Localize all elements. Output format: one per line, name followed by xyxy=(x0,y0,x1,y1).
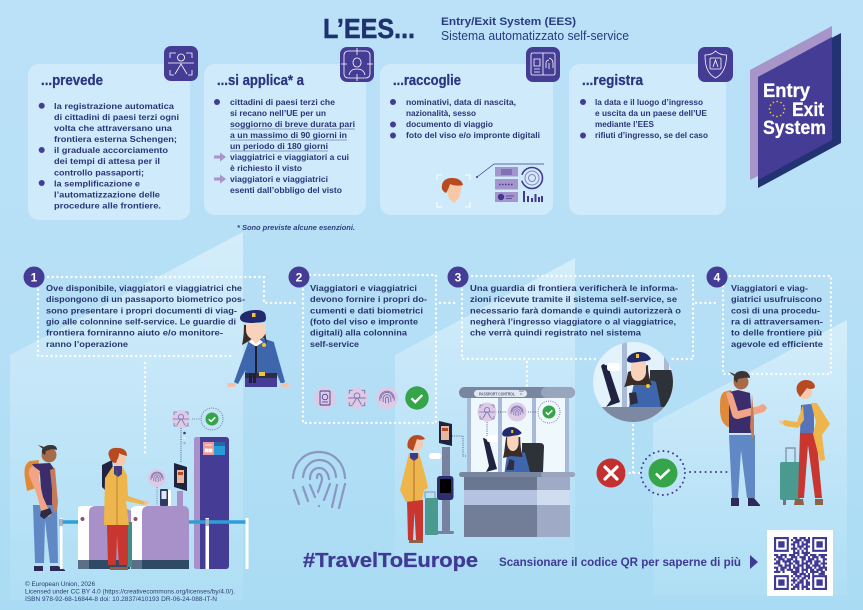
panel: prevede xyxy=(28,46,198,220)
step 3: 3 xyxy=(455,270,462,284)
QR code xyxy=(767,530,833,596)
illustration: left gate xyxy=(78,506,134,569)
bullets list: a un massimo di 90 giorni in xyxy=(230,130,347,140)
step 1: gio alle colonnine self-service. Le guardie di xyxy=(46,316,236,326)
bullets list: rifiuti d’ingresso, se del caso xyxy=(595,130,708,140)
step 2: (foto del viso e impronte xyxy=(310,316,418,326)
bullets list: si recano nell’UE per un xyxy=(230,108,326,118)
bullets list: esenti dall’obbligo del visto xyxy=(230,185,342,195)
step 2: Viaggiatori e viaggiatrici xyxy=(310,283,417,293)
icon: shield xyxy=(698,47,733,82)
bullets list: di cittadini di paesi terzi ogni xyxy=(54,112,179,122)
connectors: dotted step frames xyxy=(38,275,831,473)
bullets list xyxy=(39,101,179,210)
bullets list: soggiorno di breve durata pari xyxy=(230,119,355,129)
step 2: cumenti e dati biometrici xyxy=(310,306,423,316)
icon: face scan xyxy=(164,46,198,81)
QR prompt: Scansionare il codice QR per saperne di più xyxy=(499,557,741,569)
step 4: Viaggiatori e viag- xyxy=(731,283,808,293)
icon: large fingerprint xyxy=(293,452,345,508)
arrow: visa exempt xyxy=(214,174,226,184)
bullets list: nazionalità, sesso xyxy=(406,108,476,118)
icon: passport and fingerprint xyxy=(526,47,560,82)
logo: Entry Exit System: Exit xyxy=(792,100,825,121)
copyright footer: © European Union, 2026 xyxy=(25,581,96,588)
heading: ...raccoglie xyxy=(393,73,461,89)
step 2: self-service xyxy=(310,339,359,349)
logo: Entry Exit System: System xyxy=(763,118,826,139)
step 1: frontiera forniranno aiuto e/o monitore- xyxy=(46,328,223,338)
bullets list: la registrazione automatica xyxy=(54,101,174,111)
heading: ...registra xyxy=(582,73,644,89)
hashtag: #TravelToEurope xyxy=(303,550,478,572)
illustration: traveller with passport xyxy=(25,445,65,571)
step 1: dispongono di un passaporto biometrico pos- xyxy=(46,294,245,304)
bullets list: viaggiatori e viaggiatrici xyxy=(230,174,328,184)
illustration: kiosk xyxy=(194,437,229,569)
bullets list: frontiera esterna Schengen; xyxy=(54,134,177,144)
panel: raccoglie xyxy=(380,47,560,215)
bullets list: cittadini di paesi terzi che xyxy=(230,97,335,107)
step 2 xyxy=(288,266,427,349)
copyright footer xyxy=(25,581,235,603)
logo: Entry Exit System xyxy=(750,26,841,188)
bullets list: il graduale accorciamento xyxy=(54,145,168,155)
arrow: to QR xyxy=(750,555,758,569)
step 4: to delle frontiere più xyxy=(731,328,822,338)
copyright footer: ISBN 978-92-68-16844-8 doi: 10.2837/410193 DR-06-24-088-IT-N xyxy=(25,597,217,603)
step 1: ranno l’operazione xyxy=(46,339,128,349)
icon: approved xyxy=(641,451,685,495)
subtitle xyxy=(441,16,629,43)
connector: approved to travellers xyxy=(690,471,727,473)
bullets list: mediante l’EES xyxy=(595,119,654,129)
illustration: stanchions xyxy=(59,518,248,569)
bullets list: foto del viso e/o impronte digitali xyxy=(406,130,540,140)
illustration: right gate xyxy=(131,463,189,569)
illustration: biometric post xyxy=(437,421,474,534)
illustration: traveller at gate xyxy=(102,448,149,570)
step 2: 2 xyxy=(296,270,303,284)
bullets list xyxy=(390,97,540,140)
step 1: 1 xyxy=(31,270,38,284)
bullets list: la semplificazione e xyxy=(54,178,140,188)
icon: fingerprint badge gate xyxy=(148,469,166,505)
panel: si applica xyxy=(204,47,374,215)
bullets list: volta che attraversano una xyxy=(54,123,172,133)
step 3: negherà l’ingresso viaggiatore o al viaggiatrice, xyxy=(470,316,676,326)
step 4: così di una procedu- xyxy=(731,306,820,316)
icon: face scan gate xyxy=(172,410,200,462)
step 4: giatrici usufruiscono xyxy=(731,294,822,304)
illustration: passport control booth: PASSPORT CONTROL xyxy=(479,392,515,396)
background light shapes xyxy=(10,232,847,600)
logo: Entry Exit System: Entry xyxy=(763,81,810,102)
bullets list: è richiesto il visto xyxy=(230,163,302,173)
bullets list: procedure alle frontiere. xyxy=(54,200,161,210)
bullets list xyxy=(580,97,708,140)
bullets list: un periodo di 180 giorni xyxy=(230,141,328,151)
illustration: passport control booth xyxy=(459,387,575,537)
heading: ...si applica* a xyxy=(217,73,305,89)
bullets list: e uscita da un paese dell’UE xyxy=(595,108,707,118)
illustration: border guard xyxy=(227,310,289,387)
step 2: devono fornire i propri do- xyxy=(310,294,427,304)
step 4: agevole ed efficiente xyxy=(731,339,823,349)
heading: ...prevede xyxy=(41,73,103,89)
copyright footer: Licensed under CC BY 4.0 (https://creativecommons.org/licenses/by/4.0/). xyxy=(25,590,235,596)
illustration: travellers leaving xyxy=(720,371,830,506)
bullets list: l’automatizzazione delle xyxy=(54,190,160,200)
bullets list: dei tempi di attesa per il xyxy=(54,156,160,166)
step 4 xyxy=(706,266,823,349)
bullets list: la data e il luogo d’ingresso xyxy=(595,97,703,107)
subtitle: Entry/Exit System (EES) xyxy=(441,16,576,28)
step 3: che verrà quindi registrato nel sistema xyxy=(470,328,641,338)
bullets list: documento di viaggio xyxy=(406,119,493,129)
step 4: 4 xyxy=(714,270,721,284)
title: L’EES... xyxy=(323,13,415,44)
step 3: Una guardia di frontiera verificherà le informa- xyxy=(470,283,678,293)
panel: registra xyxy=(569,47,733,215)
bullets list: nominativi, data di nascita, xyxy=(406,97,516,107)
bullets list: viaggiatrici e viaggiatori a cui xyxy=(230,152,349,162)
icon row: step 2 xyxy=(314,386,429,410)
icon: check gate xyxy=(201,408,223,430)
step 3: necessario farà domande e quindi autorizzerà o xyxy=(470,306,681,316)
step 3 xyxy=(448,266,681,338)
footnote: * Sono previste alcune esenzioni. xyxy=(237,223,355,232)
icon: rejected xyxy=(596,458,626,488)
icon: face target xyxy=(340,47,374,82)
step 1 xyxy=(24,266,245,349)
bullets list xyxy=(214,97,355,195)
step 3: zioni ricevute tramite il sistema self-service, se xyxy=(470,294,677,304)
bullets list: controllo passaporti; xyxy=(54,168,144,178)
step 2: digitali) alla colonnina xyxy=(310,328,407,338)
arrow: visa required xyxy=(214,152,226,162)
illustration: guard close-up circle xyxy=(593,342,673,422)
subtitle: Sistema automatizzato self-service xyxy=(441,29,629,43)
step 4: ra di attraversamen- xyxy=(731,316,823,326)
step 1: sono presentare i propri documenti di viag- xyxy=(46,306,237,316)
step 1: Ove disponibile, viaggiatori e viaggiatrici che xyxy=(46,283,242,293)
illustration: woman at post with suitcase xyxy=(400,435,441,543)
illustration: face scan data xyxy=(437,164,544,207)
